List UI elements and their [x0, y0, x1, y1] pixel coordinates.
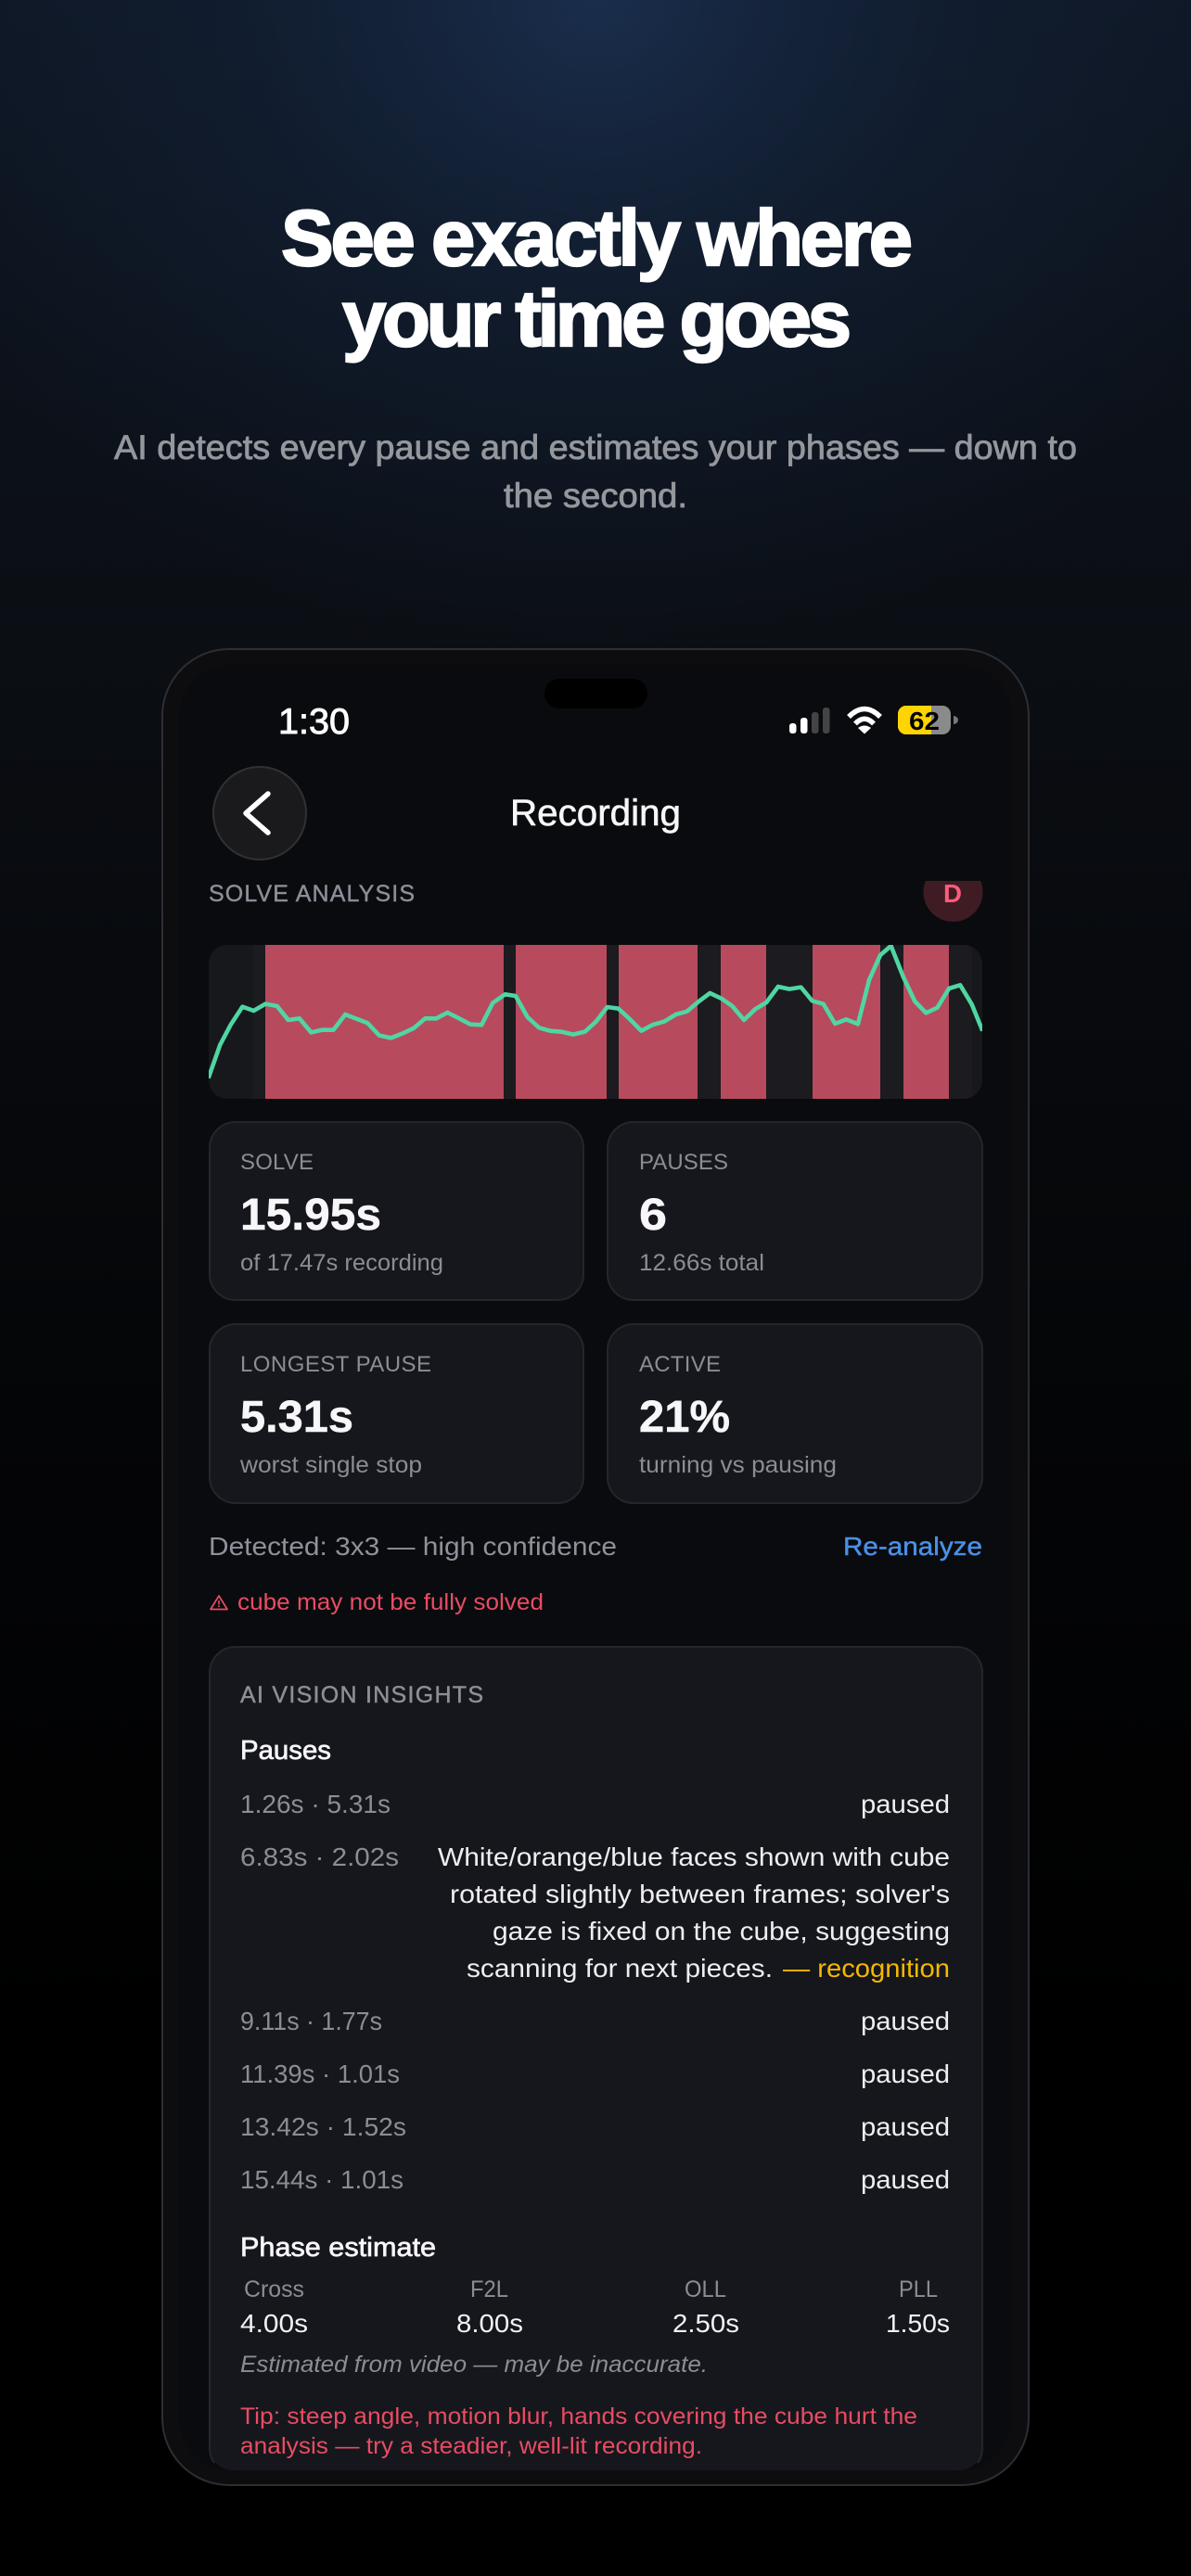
warning message: cube may not be fully solved	[237, 1589, 544, 1615]
icon: signal bars	[789, 708, 829, 733]
pauses heading: Pauses	[240, 1736, 331, 1766]
grade badge: D	[943, 879, 962, 908]
stat card: pauses: 12.66s total	[639, 1250, 764, 1276]
stat card: active: turning vs pausing	[639, 1452, 837, 1478]
pause row 3	[240, 2007, 950, 2035]
estimate disclaimer: Estimated from video — may be inaccurate.	[240, 2352, 708, 2378]
subtitle: the second.	[504, 477, 687, 515]
stat card: pauses: PAUSES	[639, 1150, 728, 1175]
pause row 4: 11.39s · 1.01s	[240, 2060, 400, 2088]
pause row 5: paused	[861, 2112, 950, 2141]
phase: cross: 4.00s	[240, 2309, 308, 2338]
pause row 5: 13.42s · 1.52s	[240, 2112, 406, 2141]
stat card: solve	[210, 1122, 583, 1300]
pause row 1: 1.26s · 5.31s	[240, 1790, 391, 1818]
pause row 3: 9.11s · 1.77s	[240, 2007, 382, 2035]
phase: F2L: F2L	[470, 2276, 508, 2302]
title: See exactly where	[281, 195, 913, 283]
stat card: active: 21%	[639, 1393, 730, 1442]
phone screen	[179, 665, 1012, 2470]
icon: battery 62: 62	[909, 707, 940, 735]
dynamic island	[544, 679, 647, 708]
phase: PLL: 1.50s	[886, 2309, 950, 2338]
pause row 2 with note	[240, 1843, 950, 1983]
phase: PLL: PLL	[899, 2276, 938, 2302]
stat card: solve: 15.95s	[240, 1191, 381, 1240]
chart: solve timeline with motion line	[209, 945, 982, 1099]
pause row 2 with note: gaze is fixed on the cube, suggesting	[493, 1917, 950, 1945]
title: your time goes	[342, 275, 852, 363]
stat card: longest pause: worst single stop	[239, 1452, 422, 1478]
detected label: Detected: 3x3 — high confidence	[209, 1532, 617, 1561]
phase: cross	[240, 2276, 308, 2338]
pause row 2 with note: scanning for next pieces.	[467, 1954, 773, 1983]
panel heading: AI VISION INSIGHTS	[240, 1682, 483, 1708]
stat card: active: ACTIVE	[639, 1352, 721, 1377]
stat card: solve: SOLVE	[240, 1150, 314, 1175]
phase estimate heading: Phase estimate	[240, 2233, 436, 2263]
stat card: pauses	[608, 1122, 982, 1300]
tip message: Tip: steep angle, motion blur, hands covering the cube hurt the	[240, 2404, 917, 2429]
pause row 2 with note: rotated slightly between frames; solver's	[450, 1880, 950, 1908]
pause row 6	[240, 2165, 950, 2194]
phase: OLL	[672, 2276, 739, 2338]
re-analyze link: Re-analyze	[843, 1532, 982, 1561]
pause row 2 with note: White/orange/blue faces shown with cube	[438, 1843, 950, 1871]
stat card: pauses: 6	[639, 1191, 667, 1240]
panel: AI vision insights	[210, 1647, 982, 2470]
subtitle	[114, 428, 1077, 515]
phase: cross: Cross	[244, 2276, 304, 2302]
phase: OLL: OLL	[685, 2276, 726, 2302]
pause row 4	[240, 2060, 950, 2088]
section heading: solve analysis: SOLVE ANALYSIS	[209, 881, 415, 907]
pause row 2 with note: — recognition	[783, 1954, 950, 1983]
tip message: analysis — try a steadier, well-lit recording.	[240, 2433, 702, 2459]
phase: OLL: 2.50s	[672, 2309, 739, 2338]
phase: F2L: 8.00s	[456, 2309, 523, 2338]
pause row 2 with note: 6.83s · 2.02s	[240, 1843, 399, 1871]
icon: wifi	[849, 708, 880, 734]
phone frame	[162, 649, 1029, 2485]
stat card: longest pause: LONGEST PAUSE	[240, 1352, 431, 1377]
phase: F2L	[456, 2276, 523, 2338]
pause row 3: paused	[861, 2007, 950, 2035]
pause row 6: 15.44s · 1.01s	[240, 2165, 403, 2194]
grade badge	[924, 881, 983, 922]
icon: battery 62	[898, 706, 958, 735]
pause row 1	[240, 1790, 950, 1818]
status bar time: 1:30	[278, 702, 350, 742]
title	[281, 195, 913, 363]
stat card: longest pause: 5.31s	[240, 1393, 353, 1442]
phase: PLL	[886, 2276, 950, 2338]
back button	[213, 767, 306, 860]
stat card: solve: of 17.47s recording	[240, 1250, 443, 1276]
screen title: Recording	[510, 793, 681, 834]
pause row 6: paused	[861, 2165, 950, 2194]
pause row 4: paused	[861, 2060, 950, 2088]
stat card: longest pause	[210, 1324, 583, 1503]
pause row 5	[240, 2112, 950, 2141]
pause row 1: paused	[861, 1790, 950, 1818]
tip message	[240, 2404, 917, 2459]
subtitle: AI detects every pause and estimates your phases — down to	[114, 428, 1077, 466]
stat card: active	[608, 1324, 982, 1503]
